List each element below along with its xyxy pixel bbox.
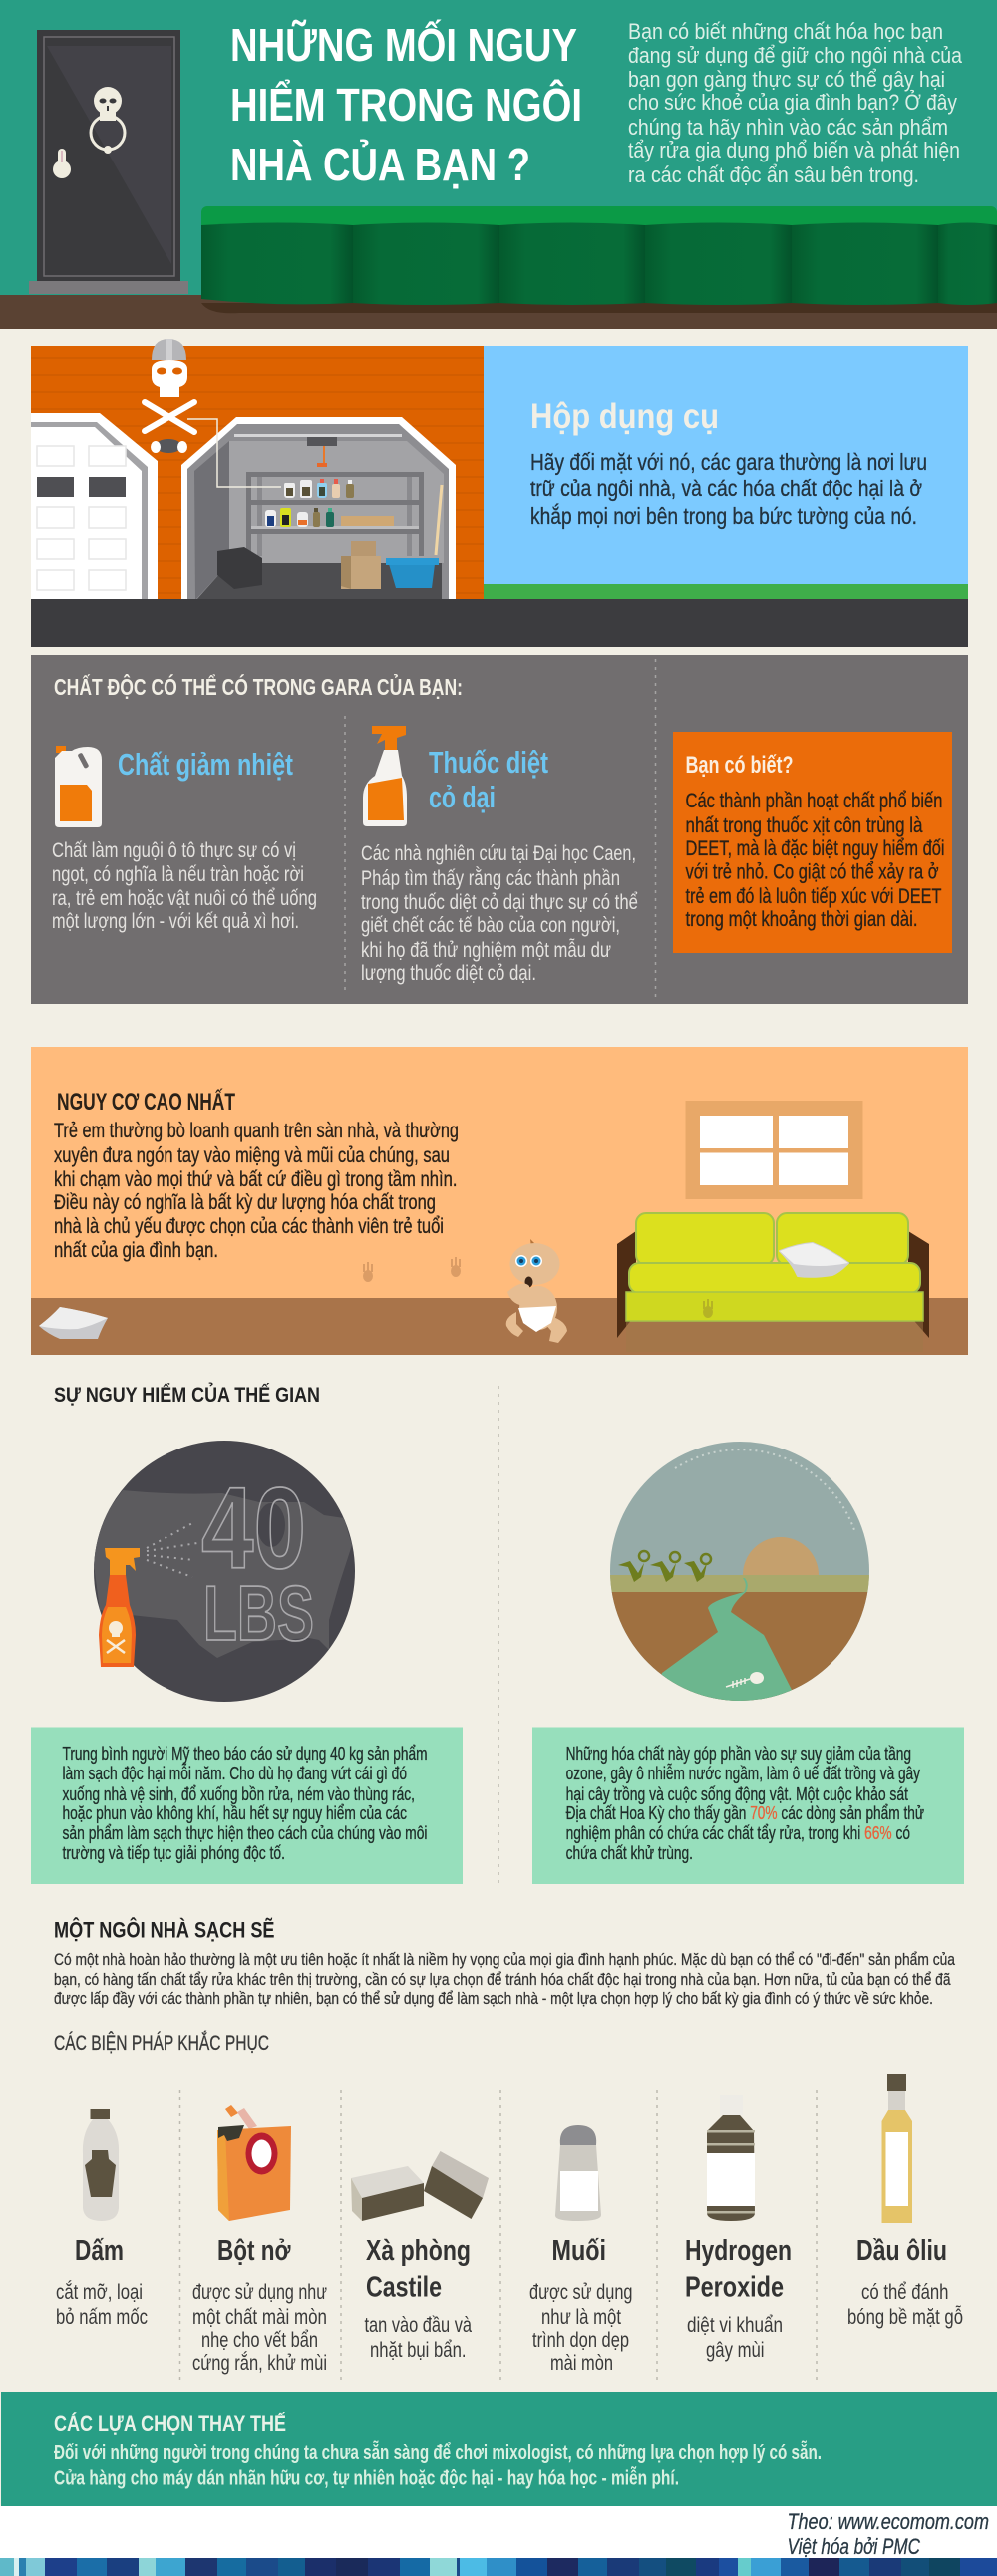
- callout: pollution: [532, 1727, 964, 1884]
- item: olive oil: [847, 2074, 963, 2329]
- credits: [788, 2509, 989, 2559]
- icon: shelving: [246, 472, 424, 561]
- callout: usage: xuống nhà vệ sinh, đổ xuống bồn rửa, ném vào thùng rác,: [62, 1784, 415, 1804]
- icon: vinegar bottle: [83, 2109, 119, 2221]
- panel: alternatives footer: CÁC LỰA CHỌN THAY THẾ: [54, 2412, 286, 2436]
- white credit band: [0, 2506, 997, 2558]
- heading: Hộp dụng cụ: [530, 397, 719, 436]
- callout: pollution: chứa chất khử trùng.: [566, 1843, 693, 1863]
- icon: hedge: [201, 206, 997, 313]
- spray mist: [147, 1522, 197, 1577]
- title: NHỮNG MỐI NGUY: [230, 19, 577, 71]
- item: salt: trình dọn dẹp: [532, 2329, 629, 2352]
- callout: usage: hoặc phun vào không khí, hầu hết sự nguy hiểm của các: [62, 1803, 407, 1823]
- callout: usage: trường và tiếp tục giải phóng độc tố.: [62, 1843, 285, 1863]
- panel: environmental danger: [31, 1383, 964, 1884]
- icon: handprints: [363, 1257, 713, 1318]
- coolant text: một lượng lớn - với kết quả xì hơi.: [52, 910, 299, 933]
- item: castile soap: [351, 2151, 489, 2362]
- icon: weedkiller spray bottle: [363, 726, 407, 826]
- item: baking soda: một chất mài mòn: [192, 2306, 327, 2329]
- coolant text: ngọt, có nghĩa là nếu tràn hoặc rời: [52, 863, 304, 886]
- icon: peroxide bottle: [707, 2095, 755, 2221]
- icon: baby: [506, 1239, 567, 1343]
- icon: open garage interior: [181, 417, 456, 600]
- callout: did you know: Bạn có biết?: [686, 752, 794, 779]
- item: baking soda: cứng rắn, khử mùi: [192, 2352, 327, 2375]
- chart: polluted landscape circle: [610, 1442, 869, 1701]
- callout: pollution: hại cây trồng và cuộc sống động vật. Một cuộc khảo sát: [566, 1784, 908, 1804]
- icon: floor pillow: [39, 1307, 108, 1339]
- item: hydrogen peroxide: gây mùi: [706, 2339, 764, 2362]
- callout: pollution: nghiệm phân có chứa các chất tẩy rửa, trong khi 66% có: [566, 1823, 910, 1843]
- icon: storage boxes and bin: [217, 485, 442, 589]
- weedkiller heading: [429, 745, 548, 814]
- icon: wilting plants: [618, 1551, 711, 1582]
- coolant text: ra, trẻ em hoặc vật nuôi có thể uống: [52, 887, 317, 910]
- coolant text: Chất làm nguội ô tô thực sự có vị: [52, 839, 296, 862]
- item: salt: [529, 2125, 632, 2375]
- chart: 40 lbs circle: [90, 1441, 355, 1702]
- credits: Việt hóa bởi PMC: [788, 2534, 920, 2559]
- icon: dead fish: [726, 1672, 764, 1688]
- item: castile soap: Castile: [366, 2271, 442, 2303]
- intro text: cho sức khoẻ của gia đình bạn? Ở đây: [628, 90, 957, 115]
- text block: nhất của gia đình bạn.: [54, 1239, 218, 1262]
- icon: skull with hard hat, crossbones and mask: [145, 339, 194, 453]
- item: olive oil: Dầu ôliu: [856, 2235, 947, 2267]
- weedkiller text: giết chết các tế bào của con người,: [361, 914, 620, 937]
- callout: usage: làm sạch độc hại mỗi năm. Cho dù họ đang vứt cái gì đó: [62, 1763, 407, 1783]
- 40 LBS label: LBS: [203, 1569, 314, 1657]
- heading: NGUY CƠ CAO NHẤT: [57, 1088, 235, 1116]
- coolant text: [52, 839, 317, 933]
- panel: toolbox intro: [484, 346, 968, 599]
- callout: pollution: Địa chất Hoa Kỳ cho thấy gần 70% các dòng sản phẩm thử: [566, 1803, 924, 1823]
- icon: door with skull knocker: [29, 30, 188, 294]
- heading: MỘT NGÔI NHÀ SẠCH SẼ: [54, 1918, 275, 1942]
- weedkiller text: Các nhà nghiên cứu tại Đại học Caen,: [361, 842, 636, 865]
- weedkiller heading: Thuốc diệt: [429, 745, 548, 780]
- road: [31, 599, 968, 647]
- item: olive oil: có thể đánh: [861, 2281, 949, 2304]
- text block: nhà là chủ yếu được chọn của các thành viên trẻ tuổi: [54, 1215, 444, 1238]
- title: [230, 19, 582, 190]
- item: salt: Muối: [552, 2235, 606, 2267]
- text block: [54, 1950, 955, 2008]
- panel: a clean home: [54, 1918, 963, 2384]
- panel: garage poisons: [31, 655, 968, 1004]
- intro text: đang sử dụng để giữ cho ngôi nhà của: [628, 43, 963, 68]
- item: hydrogen peroxide: Peroxide: [685, 2271, 784, 2303]
- icon: baking soda box: [217, 2105, 291, 2221]
- panel: garage illustration: [31, 339, 484, 600]
- icon: coolant jug: [55, 746, 102, 827]
- title: HIỂM TRONG NGÔI: [230, 79, 582, 131]
- item: castile soap: tan vào đầu và: [365, 2314, 472, 2337]
- item: salt: như là một: [541, 2306, 621, 2329]
- title: NHÀ CỦA BẠN ?: [230, 139, 530, 190]
- text block: xuyên đưa ngón tay vào miệng và mũi của chúng, sau: [54, 1144, 450, 1167]
- item: vinegar: bỏ nấm mốc: [56, 2306, 148, 2329]
- item: vinegar: cắt mỡ, loại: [56, 2281, 143, 2304]
- callout: did you know: trong một khoảng thời gian dài.: [686, 908, 917, 931]
- text block: trữ của ngôi nhà, và các hóa chất độc hại là ở: [530, 476, 922, 501]
- icon: soap bars: [351, 2151, 489, 2221]
- icon: chemical bottles: [265, 479, 394, 527]
- panel: highest risk: [31, 1047, 968, 1355]
- icon: window: [686, 1101, 863, 1199]
- icon: spray bottle with skull: [99, 1548, 140, 1667]
- weedkiller text: khi họ đã thử nghiệm một mẫu dư: [361, 939, 611, 962]
- text block: Điều này có nghĩa là bất kỳ dư lượng hóa chất trong: [54, 1191, 436, 1214]
- text block: Trẻ em thường bò loanh quanh trên sàn nhà, và thường: [54, 1120, 459, 1142]
- weedkiller heading: cỏ dại: [429, 780, 496, 814]
- item: baking soda: [192, 2105, 327, 2375]
- item: baking soda: Bột nở: [217, 2235, 291, 2267]
- panel: alternatives footer: Cửa hàng cho máy dán nhãn hữu cơ, tự nhiên hoặc độc hại - hay hóa học - miễn phí.: [54, 2466, 679, 2490]
- callout: did you know: [673, 732, 952, 953]
- item: hydrogen peroxide: Hydrogen: [685, 2235, 792, 2267]
- intro text: ra các chất độc ẩn sâu bên trong.: [628, 162, 919, 187]
- weedkiller text: trong thuốc diệt cỏ dại thực sự có thể: [361, 891, 638, 914]
- item: vinegar: Dấm: [75, 2235, 124, 2267]
- text block: [54, 1120, 459, 1262]
- item: vinegar: [56, 2109, 148, 2329]
- heading: SỰ NGUY HIỂM CỦA THẾ GIAN: [54, 1383, 320, 1407]
- item: castile soap: nhặt bụi bẩn.: [370, 2339, 467, 2362]
- weedkiller text: Pháp tìm thấy rằng các thành phần: [361, 867, 620, 890]
- panel: alternatives footer: [1, 2392, 997, 2506]
- 40 LBS label: [201, 1463, 314, 1657]
- weedkiller text: lượng thuốc diệt cỏ dại.: [361, 962, 536, 985]
- subheading: CÁC BIỆN PHÁP KHẮC PHỤC: [54, 2031, 269, 2055]
- weedkiller text: [361, 842, 638, 985]
- text block: khắp mọi nơi bên trong ba bức tường của nó.: [530, 503, 917, 529]
- heading: CHẤT ĐỘC CÓ THỂ CÓ TRONG GARA CỦA BẠN:: [54, 672, 463, 700]
- icon: left garage door: [31, 413, 158, 600]
- coolant heading: Chất giảm nhiệt: [118, 747, 293, 782]
- intro text: bạn gọn gàng thực sự có thể gây hại: [628, 67, 945, 92]
- text block: [530, 449, 927, 529]
- callout: usage: [31, 1727, 463, 1884]
- item: salt: được sử dụng: [529, 2281, 632, 2304]
- callout: usage: sản phẩm làm sạch thực hiện theo cách của chúng vào môi: [62, 1823, 427, 1843]
- icon: olive oil bottle: [881, 2074, 912, 2223]
- item: castile soap: Xà phòng: [366, 2235, 471, 2267]
- icon: sofa: [617, 1213, 929, 1352]
- text block: Hãy đối mặt với nó, các gara thường là nơi lưu: [530, 449, 927, 475]
- item: salt: mài mòn: [550, 2352, 613, 2375]
- 40 LBS label: 40: [201, 1463, 306, 1593]
- callout: did you know: nhất trong thuốc xịt côn trùng là: [686, 814, 923, 837]
- item: baking soda: được sử dụng như: [192, 2281, 327, 2304]
- icon: salt shaker: [555, 2125, 601, 2221]
- intro text: [628, 19, 963, 187]
- intro text: Bạn có biết những chất hóa học bạn: [628, 19, 943, 44]
- item: hydrogen peroxide: diệt vi khuẩn: [687, 2314, 783, 2337]
- item: hydrogen peroxide: [685, 2095, 792, 2362]
- panel: header: [0, 0, 997, 329]
- stripe band: [0, 2558, 997, 2576]
- text block: khi chạm vào mọi thứ và bất cứ điều gì trong tầm nhìn.: [54, 1168, 457, 1191]
- callout: usage: Trung bình người Mỹ theo báo cáo sử dụng 40 kg sản phẩm: [62, 1744, 427, 1764]
- intro text: tẩy rửa gia dụng phổ biến và phát hiện: [628, 138, 960, 162]
- item: baking soda: nhẹ cho vết bẩn: [201, 2329, 318, 2352]
- intro text: chúng ta hãy nhìn vào các sản phẩm: [628, 115, 948, 140]
- item: olive oil: bóng bề mặt gỗ: [847, 2306, 963, 2329]
